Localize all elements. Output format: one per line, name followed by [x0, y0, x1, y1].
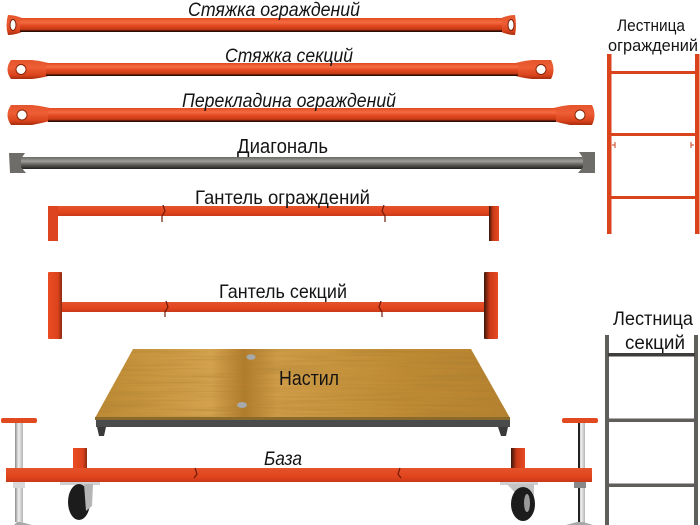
tie bar: Стяжка секций — [8, 60, 554, 79]
label: Лестница секций: Лестница — [613, 308, 693, 330]
label: Настил: Настил — [279, 368, 339, 390]
deck platform: Настил — [95, 349, 510, 436]
label: База: База — [264, 448, 302, 470]
tie bar: Стяжка ограждений — [6, 15, 516, 35]
guard ladder — [607, 54, 700, 234]
right screw jack — [562, 418, 598, 525]
label: Лестница ограждений: Лестница — [617, 16, 685, 35]
right caster — [500, 481, 538, 521]
crossbar: Перекладина ограждений — [8, 105, 594, 125]
right post — [511, 448, 525, 468]
section dumbbell: Гантель секций — [48, 272, 498, 339]
label: Перекладина ограждений: Перекладина ограждений — [182, 90, 396, 112]
left caster — [60, 481, 100, 520]
label: Стяжка секций: Стяжка секций — [225, 45, 353, 67]
label: Диагональ: Диагональ — [237, 136, 328, 158]
guard dumbbell: Гантель ограждений — [48, 205, 499, 241]
label: Лестница ограждений: ограждений — [608, 36, 698, 55]
left post — [73, 448, 87, 468]
base frame with casters and jacks — [1, 418, 598, 525]
label: Гантель секций: Гантель секций — [219, 281, 347, 303]
section ladder — [605, 335, 698, 525]
label: Лестница секций: секций — [625, 332, 685, 354]
label: Гантель ограждений: Гантель ограждений — [195, 187, 370, 209]
diagonal brace — [9, 152, 595, 173]
base beam — [6, 468, 592, 482]
left screw jack — [1, 418, 37, 525]
